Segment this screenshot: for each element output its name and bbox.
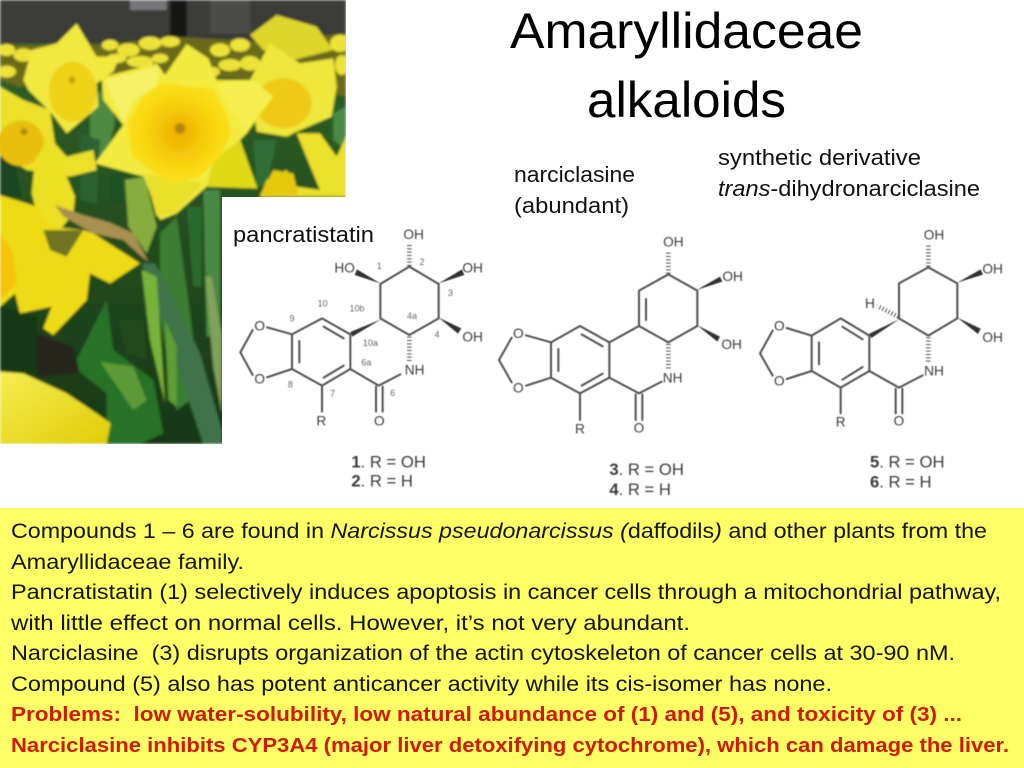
- bud bottom left: [0, 372, 111, 444]
- chemical structure: pancratistatin: R: [316, 414, 326, 429]
- chemical structure: trans-dihydronarciclasine: OH: [982, 330, 1003, 345]
- flower upper left: [23, 23, 119, 133]
- chemical structure: trans-dihydronarciclasine: O: [774, 319, 785, 334]
- main flower: [95, 44, 273, 220]
- chemical structure: pancratistatin: 2: [419, 257, 424, 267]
- chemical structure: narciclasine: 4. R = H: [609, 480, 671, 499]
- label: narciclasine (abundant): [514, 162, 635, 218]
- title: alkaloids: [587, 72, 786, 128]
- panel: summary text: [0, 508, 1024, 768]
- chemical structure: pancratistatin: 10: [318, 299, 328, 309]
- chemical structure: narciclasine: NH: [663, 370, 683, 385]
- chemical structure: pancratistatin: 9: [289, 314, 294, 324]
- findings text: Compounds 1 – 6 are found in Narcissus pseudonarcissus ( daffodils ) and other plants from the: [11, 520, 987, 543]
- chemical structure: pancratistatin: NH: [405, 362, 425, 377]
- chemical structure: narciclasine: O: [634, 420, 644, 435]
- chemical structure: pancratistatin: O: [254, 372, 265, 387]
- photo: daffodils: [0, 0, 350, 444]
- chemical structure: pancratistatin: 3: [448, 288, 453, 298]
- title: [510, 3, 863, 128]
- label: synthetic derivative: trans-dihydronarciclasine: [718, 176, 980, 201]
- chemical structure: narciclasine: OH: [663, 234, 684, 249]
- chemical structure: narciclasine: 3. R = OH: [609, 460, 684, 479]
- chemical structure: pancratistatin: OH: [462, 260, 483, 275]
- findings text: Narciclasine (3) disrupts organization of the actin cytoskeleton of cancer cells at 30-90 nM.: [11, 642, 955, 665]
- chemical structure: trans-dihydronarciclasine: OH: [924, 228, 944, 243]
- chemical structure: narciclasine: OH: [722, 269, 743, 284]
- chemical structure: trans-dihydronarciclasine: H: [865, 296, 875, 311]
- chemical structure: pancratistatin: 10b: [349, 304, 364, 314]
- drooping flower: [32, 140, 75, 230]
- chemical structure: pancratistatin: 10a: [363, 338, 378, 348]
- findings text: Pancratistatin (1) selectively induces apoptosis in cancer cells through a mitochondrial pathway,: [11, 581, 1001, 604]
- chemical structure: narciclasine: O: [513, 326, 524, 341]
- distant right flower: [250, 15, 333, 60]
- distant flowers band: [0, 33, 346, 97]
- chemical structure: trans-dihydronarciclasine: 6. R = H: [870, 472, 932, 491]
- flower left edge: [0, 87, 97, 177]
- chemical structure: trans-dihydronarciclasine: R: [836, 414, 846, 429]
- chemical structure: pancratistatin: 4: [434, 330, 439, 340]
- label: synthetic derivative: synthetic derivative: [718, 145, 921, 170]
- chemical structure: narciclasine: [499, 234, 743, 499]
- findings text: with little effect on normal cells. However, it’s not very abundant.: [10, 612, 690, 635]
- chemical structure: pancratistatin: 6a: [361, 358, 371, 368]
- findings text: Amaryllidaceae family.: [11, 551, 244, 574]
- chemical structure: narciclasine: R: [575, 422, 585, 437]
- chemical structure: trans-dihydronarciclasine: O: [774, 373, 785, 388]
- chemical structure: narciclasine: O: [513, 380, 524, 395]
- chemical structure: trans-dihydronarciclasine: [760, 228, 1003, 491]
- chemical structure: pancratistatin: O: [254, 318, 265, 333]
- chemical structure: trans-dihydronarciclasine: OH: [982, 262, 1003, 277]
- chemical structure: pancratistatin: 1: [377, 261, 382, 271]
- chemical structure: pancratistatin: 8: [288, 380, 293, 390]
- label: pancratistatin: pancratistatin: [233, 222, 374, 247]
- chemical structure: pancratistatin: OH: [462, 330, 483, 345]
- chemical structure: trans-dihydronarciclasine: 5. R = OH: [870, 452, 945, 471]
- chemical structure: pancratistatin: HO: [334, 260, 355, 275]
- findings text: [10, 520, 1001, 696]
- label: narciclasine (abundant): narciclasine: [514, 162, 635, 187]
- findings text: Compound (5) also has potent anticancer activity while its cis-isomer has none.: [11, 673, 832, 696]
- chemical structure: pancratistatin: 4a: [407, 311, 417, 321]
- chemical structure: pancratistatin: 1. R = OH: [351, 452, 426, 471]
- chemical structure: narciclasine: OH: [721, 337, 742, 352]
- chemical structure: pancratistatin: O: [374, 413, 385, 428]
- title: Amaryllidaceae: [510, 3, 863, 59]
- lower right flower: [260, 133, 346, 197]
- problems text: Problems: low water-solubility, low natural abundance of (1) and (5), and toxicity of (3) ...: [11, 703, 962, 726]
- problems text: [11, 703, 1009, 757]
- chemical structure: pancratistatin: 2. R = H: [351, 472, 413, 491]
- chemical structure: trans-dihydronarciclasine: NH: [924, 363, 944, 378]
- problems text: Narciclasine inhibits CYP3A4 (major liver detoxifying cytochrome), which can damage the liver.: [11, 734, 1009, 757]
- chemical structure: pancratistatin: OH: [403, 227, 424, 242]
- right flower: [250, 43, 337, 137]
- label: synthetic derivative: [718, 145, 980, 201]
- chemical structure: pancratistatin: 7: [330, 389, 335, 399]
- chemical structure: pancratistatin: [240, 227, 483, 491]
- chemical structure: trans-dihydronarciclasine: O: [894, 414, 904, 429]
- stems and leaves: [90, 88, 115, 160]
- chemical structure: pancratistatin: 6: [390, 388, 395, 398]
- label: narciclasine (abundant): (abundant): [514, 193, 629, 218]
